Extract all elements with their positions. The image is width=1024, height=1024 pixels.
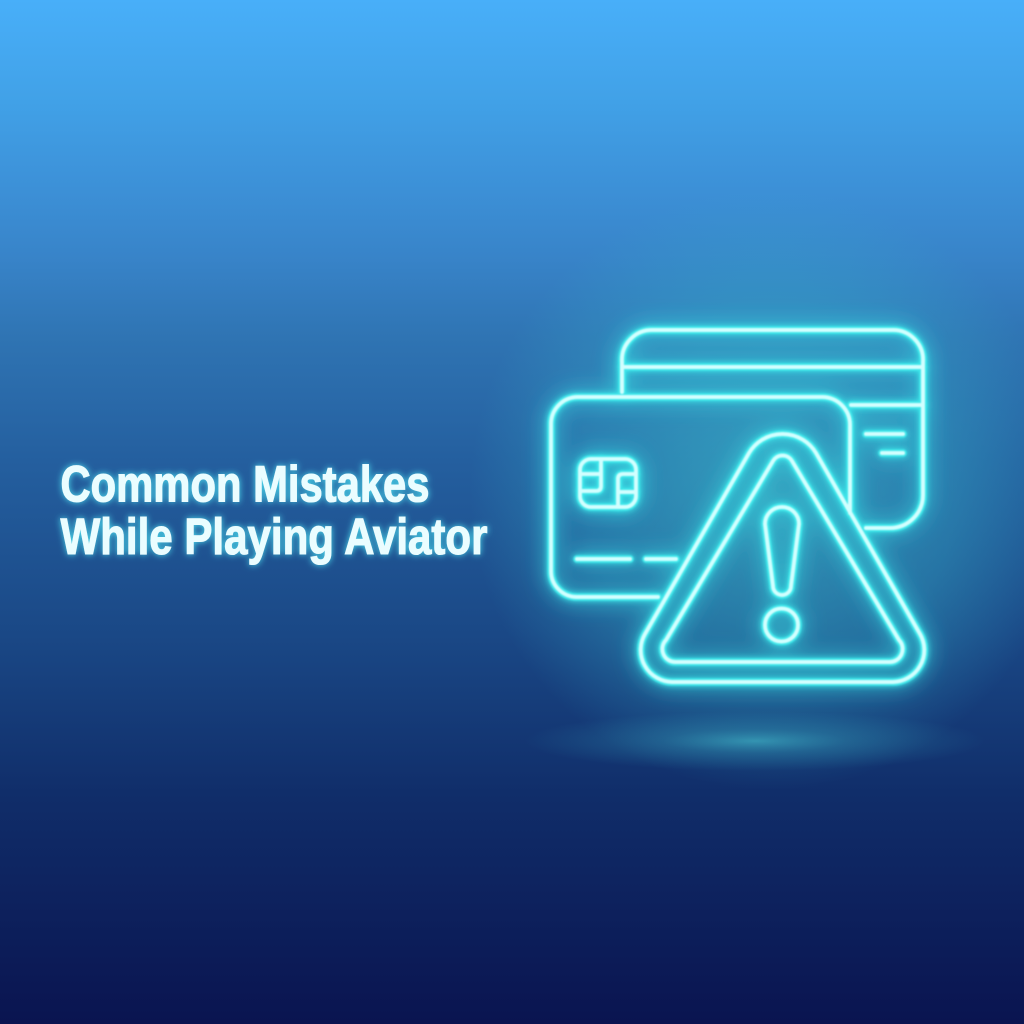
floor glow under icon: [525, 711, 985, 771]
title: Common Mistakes: [60, 456, 430, 512]
icon: credit cards with warning triangle: [551, 330, 924, 682]
glow behind icon: [440, 180, 1024, 820]
title: While Playing Aviator: [60, 508, 488, 565]
title: [60, 456, 488, 565]
